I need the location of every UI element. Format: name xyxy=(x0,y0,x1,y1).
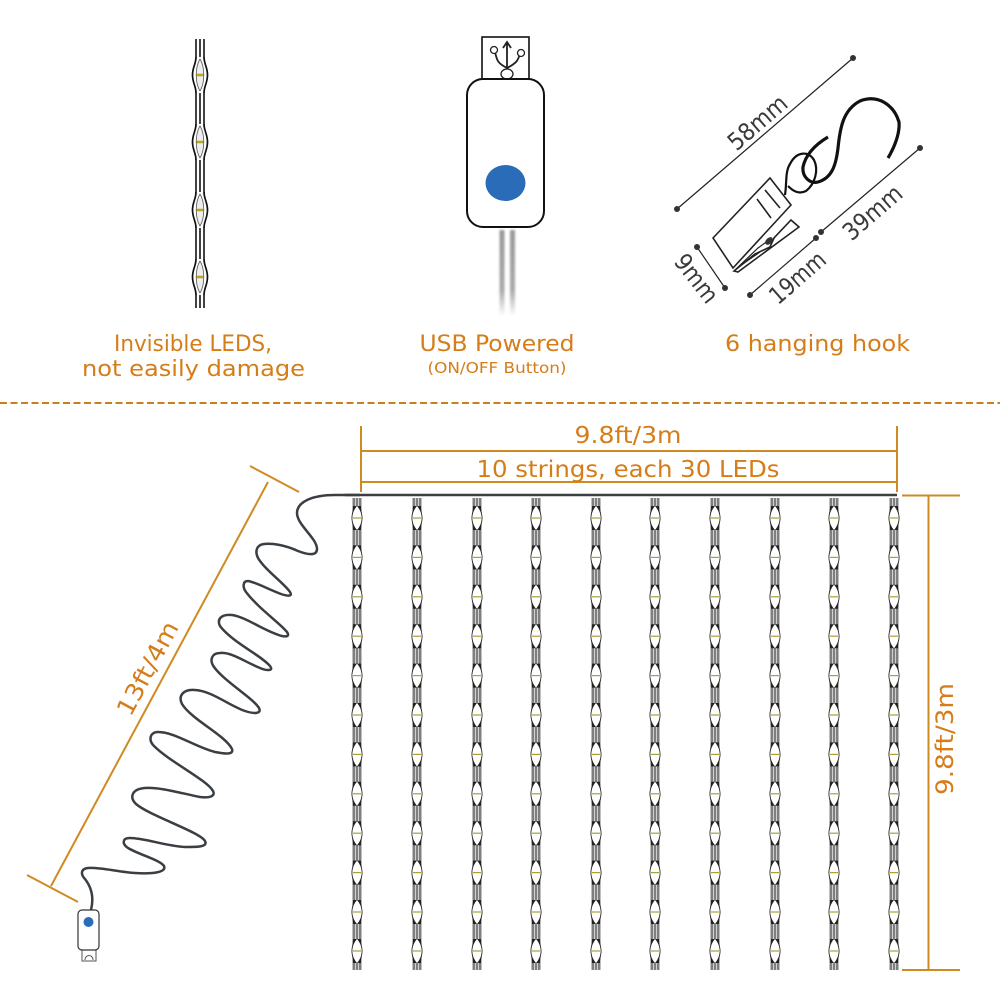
caption: USB powered xyxy=(420,332,574,377)
dimension: string height: 9.8ft/3m xyxy=(931,683,959,795)
dimension: string height xyxy=(902,496,960,970)
caption: invisible LEDs: Invisible LEDS, xyxy=(114,332,272,357)
dimension: width xyxy=(361,423,897,492)
dimension: width: 10 strings, each 30 LEDs xyxy=(476,457,780,483)
icon: USB controller xyxy=(467,37,544,316)
dimension labels: clip: 58mm xyxy=(722,89,793,156)
dimension labels: clip: 39mm xyxy=(837,179,908,246)
dimension: cable length: 13ft/4m xyxy=(111,616,185,720)
icon: small USB plug xyxy=(78,910,99,961)
icon: hanging hook clip with dimensions xyxy=(674,55,923,298)
caption: invisible LEDs: not easily damage xyxy=(82,357,305,382)
dimension labels: clip: 19mm xyxy=(764,246,832,310)
caption: hanging hook: 6 hanging hook xyxy=(725,332,910,357)
caption: USB powered: (ON/OFF Button) xyxy=(428,359,566,377)
LED strings xyxy=(345,495,900,970)
caption: invisible LEDs xyxy=(82,332,305,382)
dimension: width: 9.8ft/3m xyxy=(574,423,682,449)
icon: invisible LED wire xyxy=(192,39,208,308)
coiled cable xyxy=(82,495,360,910)
dimension labels: clip: 9mm xyxy=(668,248,724,309)
dimension: cable length xyxy=(27,466,299,902)
caption: USB powered: USB Powered xyxy=(420,332,574,357)
dimension labels: clip xyxy=(668,89,908,310)
